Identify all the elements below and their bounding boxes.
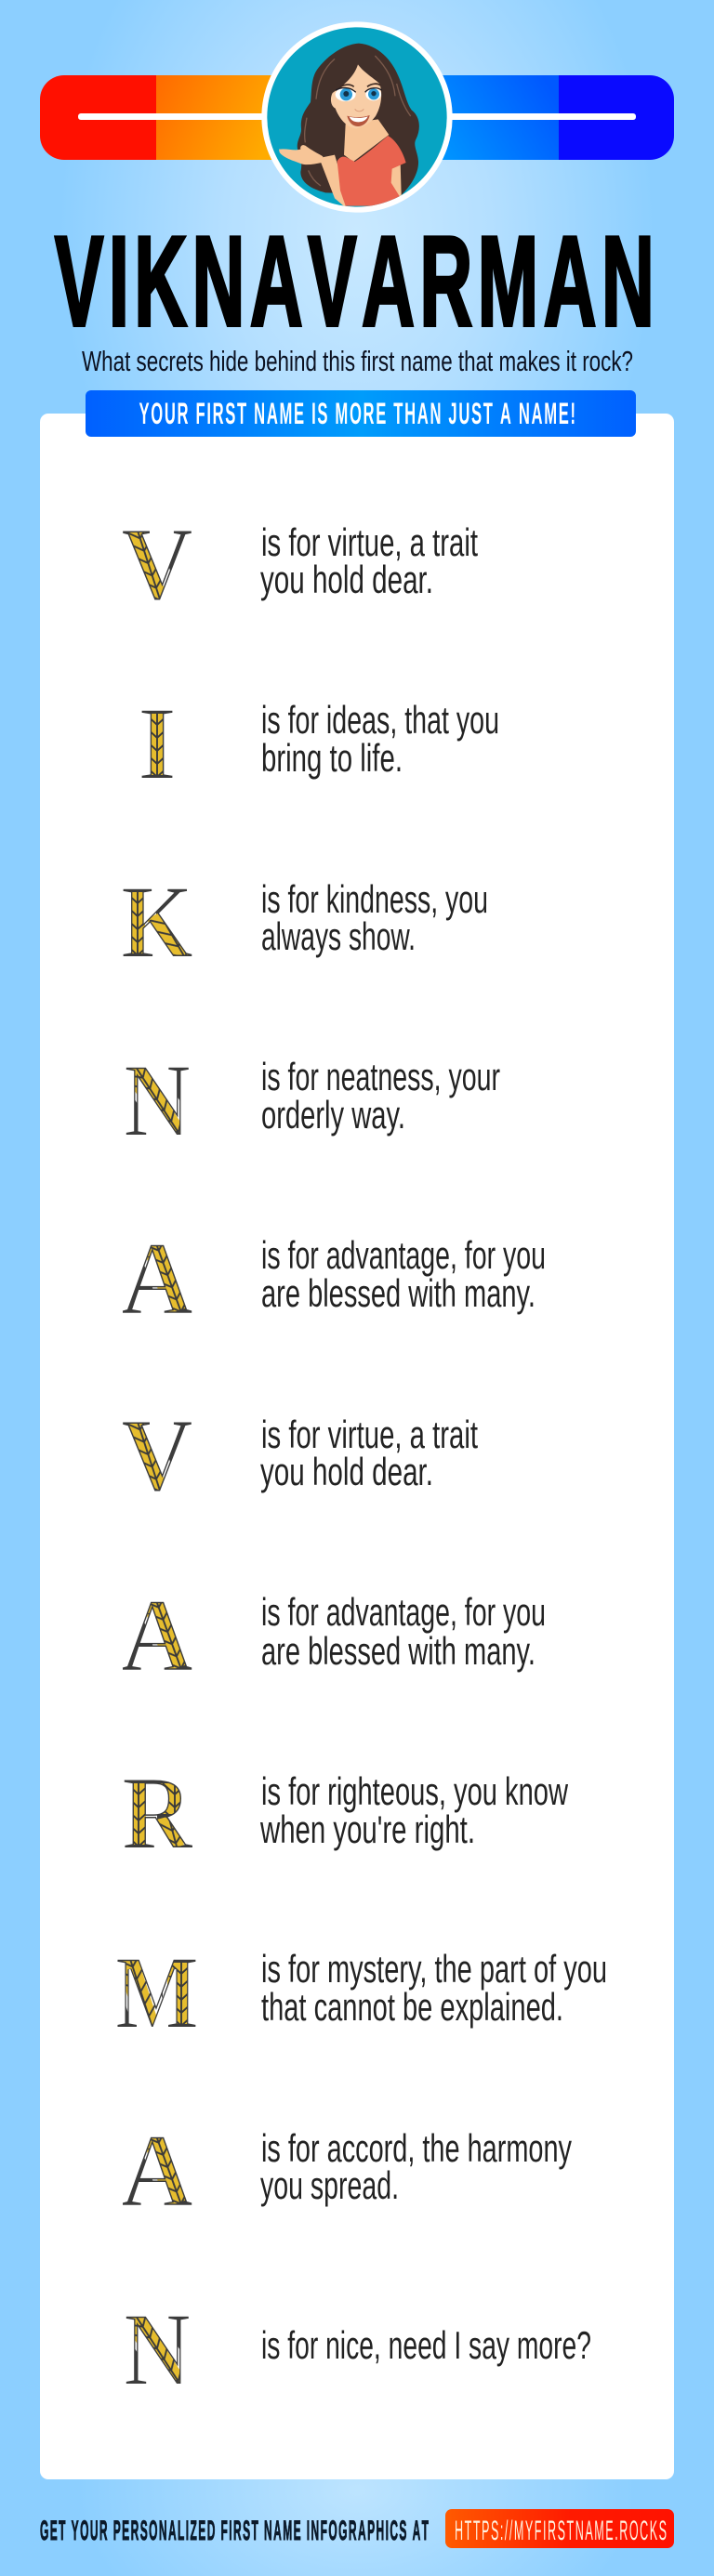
row 4: letter N — [126, 1061, 500, 1136]
icon: wheat letter A — [123, 1245, 192, 1313]
icon: wheat letter A: A — [121, 1578, 193, 1694]
icon: wheat letter A: A — [121, 1221, 193, 1337]
text: V line: you hold dear. — [260, 558, 433, 601]
text: K line: is for kindness, you — [261, 877, 488, 921]
text: K line: always show. — [261, 914, 416, 958]
icon: wheat letter N — [126, 1067, 189, 1135]
icon: wheat letter N: N — [124, 2292, 191, 2408]
text: A line — [261, 1233, 546, 1315]
text: A line: is for advantage, for you — [261, 1590, 546, 1634]
icon: wheat letter N: N — [124, 2292, 191, 2408]
icon: wheat letter R: R — [122, 1755, 193, 1872]
text: A line: you spread. — [260, 2163, 399, 2207]
text: A line: are blessed with many. — [261, 1271, 536, 1315]
row 3: letter K — [123, 885, 487, 957]
icon: wheat letter K — [123, 888, 192, 956]
text: V line — [260, 1413, 478, 1493]
row 8: letter R — [125, 1777, 569, 1851]
text: A line: are blessed with many. — [261, 1629, 536, 1673]
row 10: letter A — [123, 2134, 572, 2206]
icon: wheat letter N: N — [124, 1043, 191, 1159]
text: V line: is for virtue, a trait — [261, 1413, 478, 1456]
text: I line: bring to life. — [261, 736, 403, 780]
icon: wheat letter V — [123, 1422, 192, 1491]
icon: wheat letter A: A — [121, 1578, 193, 1694]
icon: wheat letter N: N — [124, 1043, 191, 1159]
icon: wheat letter V: V — [121, 1398, 193, 1514]
text: N line — [261, 1055, 500, 1137]
icon: wheat letter I: I — [138, 686, 177, 802]
icon: wheat letter I: I — [138, 686, 177, 802]
icon: wheat letter M: M — [115, 1935, 199, 2051]
header line — [78, 113, 636, 120]
row 6: letter V — [123, 1420, 478, 1492]
footer call to action: GET YOUR PERSONALIZED FIRST NAME INFOGRAPHICS AT — [40, 2514, 429, 2546]
text: I line — [261, 698, 499, 780]
text: N line: orderly way. — [261, 1093, 405, 1137]
icon: wheat letter K: K — [121, 864, 193, 980]
banner — [86, 390, 636, 437]
header bar — [40, 75, 674, 160]
icon: wheat letter R — [125, 1781, 192, 1847]
icon: wheat letter N: N — [124, 2292, 191, 2408]
icon: wheat letter A: A — [121, 2113, 193, 2229]
icon: wheat letter N — [126, 2316, 189, 2384]
text: A line — [261, 1590, 546, 1673]
row 2: letter I — [141, 704, 498, 779]
text: V line — [260, 520, 478, 601]
text: N line: is for neatness, your — [261, 1055, 500, 1098]
text: M line: that cannot be explained. — [261, 1985, 563, 2029]
icon: wheat letter V — [123, 532, 192, 600]
text: R line: is for righteous, you know — [261, 1769, 568, 1813]
icon: wheat letter K: K — [121, 864, 193, 980]
text: I line: is for ideas, that you — [261, 698, 499, 742]
avatar portrait — [261, 21, 453, 213]
text: R line — [259, 1769, 568, 1851]
text: M line — [261, 1947, 607, 2029]
icon: wheat letter M — [117, 1959, 195, 2027]
text: K line — [261, 877, 488, 958]
text: A line: is for accord, the harmony — [261, 2126, 572, 2170]
icon: wheat letter A: A — [121, 1221, 193, 1337]
banner: YOUR FIRST NAME IS MORE THAN JUST A NAME! — [139, 398, 575, 431]
icon: wheat letter A — [123, 1602, 192, 1670]
icon: wheat letter I — [141, 710, 173, 778]
icon: wheat letter A: A — [121, 1221, 193, 1337]
text: V line: is for virtue, a trait — [261, 520, 478, 564]
icon: wheat letter A: A — [121, 1578, 193, 1694]
row 7: letter A — [123, 1597, 545, 1673]
row 1: letter V — [123, 528, 478, 600]
icon: wheat letter V: V — [121, 1398, 193, 1514]
icon: wheat letter V: V — [121, 1398, 193, 1514]
icon: wheat letter M: M — [115, 1935, 199, 2051]
icon: wheat letter R: R — [122, 1755, 193, 1872]
icon: wheat letter N: N — [124, 1043, 191, 1159]
icon: wheat letter K: K — [121, 864, 193, 980]
footer url button: HTTPS://MYFIRSTNAME.ROCKS — [455, 2515, 667, 2546]
text: V line: you hold dear. — [260, 1450, 433, 1493]
text: R line: when you're right. — [259, 1807, 475, 1851]
icon: wheat letter R: R — [122, 1755, 193, 1872]
row 9: letter M — [117, 1953, 606, 2028]
text: A line — [260, 2126, 572, 2207]
text: A line: is for advantage, for you — [261, 1233, 546, 1277]
icon: wheat letter V: V — [121, 506, 193, 623]
icon: wheat letter V: V — [121, 506, 193, 623]
main white panel — [40, 414, 674, 2479]
row 11: letter N — [126, 2316, 590, 2384]
icon: wheat letter A — [123, 2137, 192, 2205]
icon: wheat letter V: V — [121, 506, 193, 623]
title: VIKNAVARMAN — [55, 210, 654, 352]
icon: wheat letter I: I — [138, 686, 177, 802]
icon: wheat letter A: A — [121, 2113, 193, 2229]
row 5: letter A — [123, 1240, 545, 1314]
icon: wheat letter M: M — [115, 1935, 199, 2051]
icon: wheat letter A: A — [121, 2113, 193, 2229]
